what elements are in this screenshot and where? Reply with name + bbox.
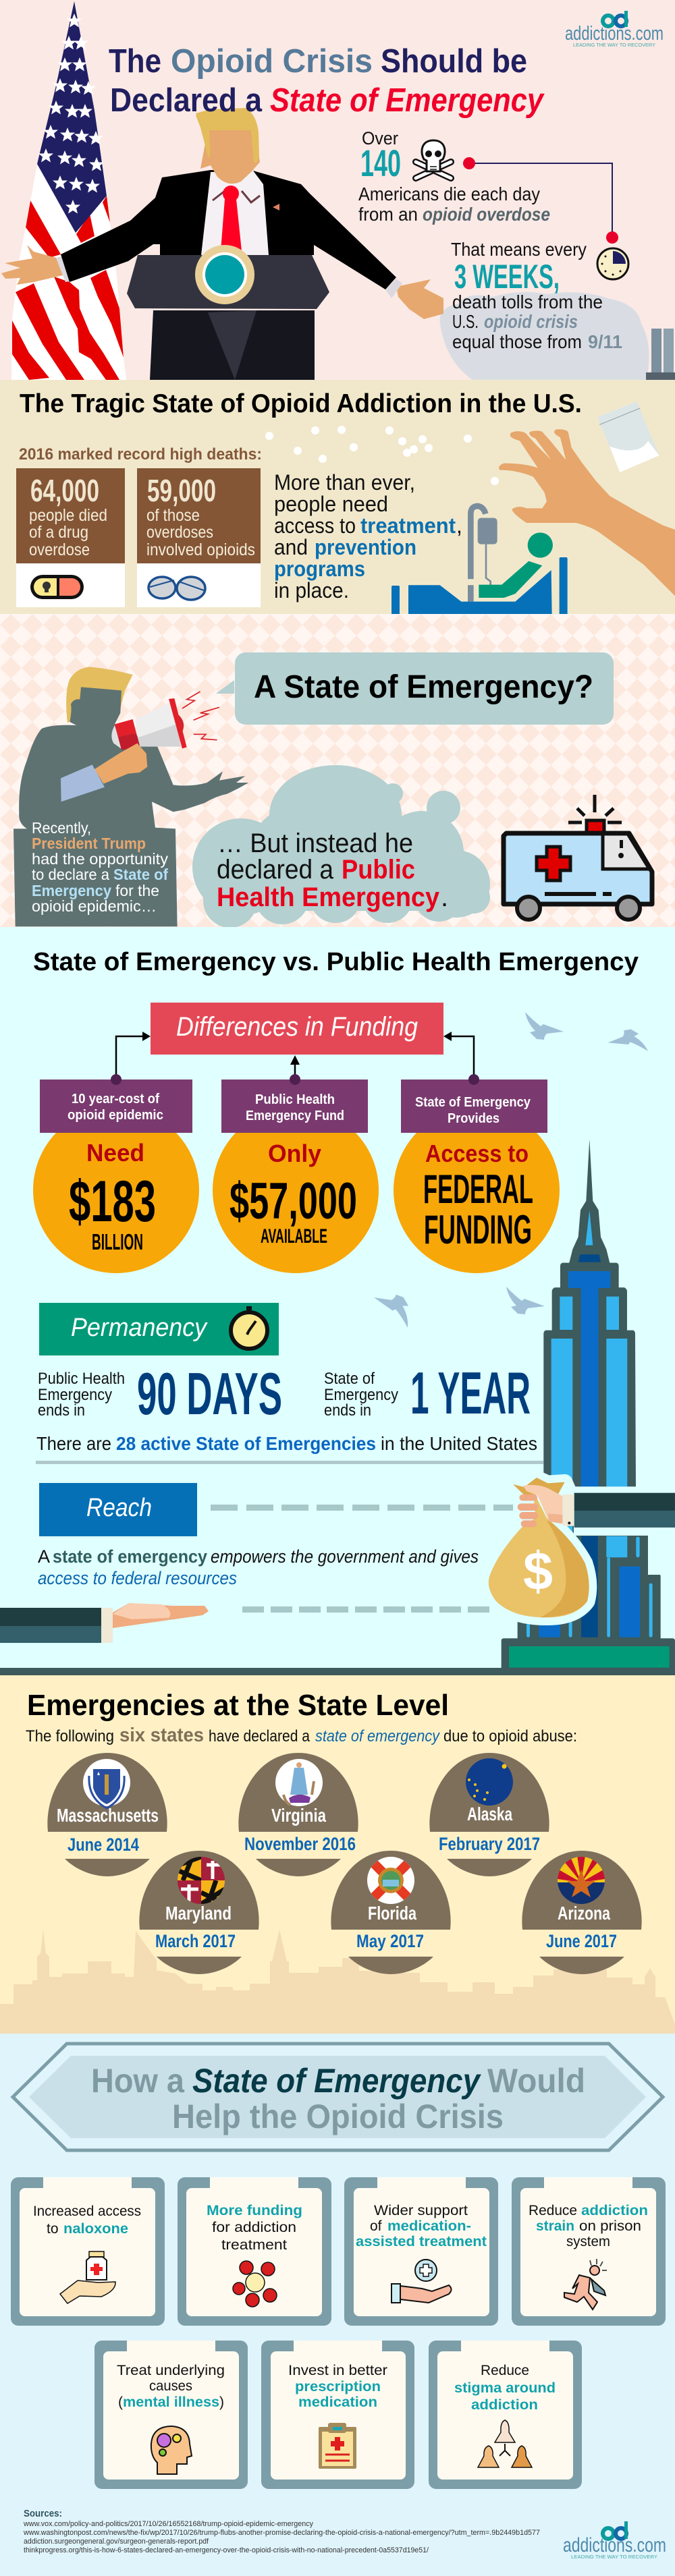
text: more than ever: programs (274, 557, 365, 581)
funding column: need: Need (86, 1139, 144, 1167)
thought cloud: Public (342, 855, 415, 885)
hexagon banner: State of Emergency (192, 2062, 481, 2100)
stat card: 59,000: of those (146, 506, 200, 525)
durations: 1 YEAR (410, 1360, 531, 1426)
text: reach description: access to federal resources (38, 1568, 237, 1588)
icon: skull and crossbones (416, 140, 451, 178)
arrows (116, 1032, 474, 1080)
funding column: access (394, 1074, 560, 1273)
card: more funding: treatment (221, 2237, 287, 2253)
text: more than ever: and (274, 535, 308, 559)
icon: dollar sign: $ (523, 1541, 553, 1601)
stat card: 59,000: overdoses (146, 523, 213, 542)
funding column: only: $57,000 (230, 1173, 357, 1230)
hexagon banner: Help the Opioid Crisis (172, 2098, 504, 2135)
card: medication-assisted treatment: of (370, 2218, 382, 2234)
card: prison system: addiction (581, 2203, 648, 2218)
text: recently president trump: had the opportunity (32, 850, 169, 868)
panel: emergencies at the state level (0, 1675, 675, 2034)
heading: State of Emergency vs. Public Health Emergency (33, 948, 639, 976)
hexagon banner: How a (91, 2062, 185, 2100)
callout: every 3 weeks: That means every (451, 239, 587, 260)
text: more than ever: More than ever, (274, 470, 415, 495)
hand reaching (499, 429, 675, 596)
card: prison system: strain (536, 2218, 574, 2234)
panel: how it would help (0, 2034, 675, 2576)
text: 28 active emergencies: There are (36, 1433, 111, 1454)
text: reach description: A (38, 1546, 50, 1567)
funding column: need: 10 year-cost of (72, 1092, 159, 1107)
icon: clock (597, 248, 628, 279)
card: stigma: addiction (471, 2397, 538, 2413)
durations: Emergency (324, 1386, 398, 1404)
stat card: 59,000: 59,000 (147, 473, 216, 508)
sources: addiction.surgeongeneral.gov/surgeon-generals-report.pdf (24, 2538, 209, 2546)
card: prescription medication (261, 2341, 414, 2489)
American flag (11, 1, 126, 380)
text: more than ever (274, 470, 462, 603)
callout: 140 deaths per day (358, 128, 550, 225)
stat card: 59,000: involved opioids (146, 540, 255, 559)
title: Declared a (110, 82, 263, 119)
funding column: access: Provides (448, 1111, 500, 1126)
text: recently president trump: Recently, (32, 819, 91, 837)
card: mental illness: causes (149, 2378, 192, 2394)
text: more than ever: , (456, 513, 462, 538)
title: State of Emergency (270, 82, 545, 119)
card: more funding: More funding (207, 2203, 302, 2218)
subtitle: have declared a (209, 1727, 310, 1745)
card: naloxone (11, 2177, 165, 2326)
icon: powder bag (597, 401, 659, 472)
card: medication-assisted treatment (344, 2177, 498, 2326)
funding column: need: opioid epidemic (68, 1108, 163, 1123)
card: mental illness: ( (118, 2395, 123, 2410)
thought cloud: … But instead he (217, 829, 413, 858)
callout: every 3 weeks (451, 239, 622, 352)
state: Virginia (238, 1753, 358, 1876)
subtitle: due to opioid abuse: (443, 1727, 577, 1745)
hand holding money bag (489, 1478, 675, 1617)
heading box: reach: Reach (86, 1494, 152, 1522)
funding column: only: Emergency Fund (246, 1109, 344, 1123)
state: Massachusetts (47, 1753, 167, 1876)
stat card: 64,000: overdose (29, 540, 90, 559)
funding column: only: AVAILABLE (261, 1225, 327, 1248)
icon: hospital bed and patient (392, 506, 568, 615)
funding column: need: $183 (69, 1169, 156, 1234)
callout: every 3 weeks: opioid crisis (484, 311, 578, 332)
funding column: need: BILLION (92, 1229, 143, 1254)
card: more funding: for addiction (212, 2220, 296, 2235)
callout: 140 deaths per day: Over (362, 128, 398, 148)
card: more funding (178, 2177, 331, 2326)
card: prescription medication: prescription (295, 2379, 381, 2395)
heading: Emergencies at the State Level (27, 1689, 449, 1722)
panel: state of emergency vs public health emergency (0, 927, 675, 1675)
dashes (211, 1505, 513, 1613)
card: stigma: Reduce (481, 2363, 529, 2378)
subtitle (26, 1725, 577, 1746)
heading box: differences in funding (151, 1003, 443, 1055)
card: naloxone: Increased access (33, 2204, 141, 2219)
panel: a state of emergency (0, 614, 675, 928)
state: Maryland: March 2017 (155, 1931, 236, 1951)
text: more than ever: prevention (315, 535, 416, 559)
thought cloud (192, 765, 490, 928)
durations: ends in (38, 1401, 85, 1420)
icon: ambulance (504, 795, 652, 920)
thought cloud: declared a (217, 855, 334, 885)
state: Alaska: February 2017 (439, 1834, 540, 1854)
text: recently president trump: opioid epidemic… (32, 897, 157, 915)
text: more than ever: people need (274, 492, 388, 516)
stat card: 64,000: of a drug (29, 523, 88, 542)
figure with megaphone (14, 667, 248, 926)
logo: addictions.com footer (563, 2521, 666, 2560)
hexagon banner (13, 2044, 663, 2150)
state: Arizona: June 2017 (546, 1931, 617, 1951)
panel: hero (0, 0, 675, 380)
title: Opioid Crisis (171, 43, 373, 80)
card: medication-assisted treatment: assisted treatment (356, 2234, 487, 2249)
text: reach description (38, 1546, 479, 1588)
state: Florida: May 2017 (356, 1931, 424, 1951)
state: Virginia: Virginia (271, 1805, 326, 1826)
text: 28 active emergencies: in the United States (381, 1433, 537, 1454)
funding column: access: Access to (425, 1140, 529, 1167)
card: stigma (429, 2341, 582, 2489)
text: 2016 record deaths: 2016 marked record high deaths: (19, 445, 262, 464)
text: recently president trump: President Trump (32, 835, 146, 852)
heading box: permanency (39, 1303, 279, 1355)
thought cloud: . (441, 883, 448, 912)
card: mental illness (94, 2341, 248, 2489)
text: recently president trump: Emergency (32, 882, 111, 899)
logo: addictions.com: LEADING THE WAY TO RECOVERY (573, 43, 655, 48)
text: more than ever: treatment (360, 513, 456, 538)
logo: addictions.com footer: LEADING THE WAY TO RECOVERY (571, 2554, 657, 2560)
text: reach description: empowers the government and gives (211, 1546, 479, 1567)
callout: every 3 weeks: 9/11 (588, 331, 622, 352)
text: more than ever: access to (274, 513, 356, 538)
text: 28 active emergencies (36, 1433, 537, 1454)
connector line (463, 157, 618, 244)
card: naloxone: naloxone (63, 2221, 128, 2237)
president figure at podium (1, 108, 443, 380)
state: Arizona (522, 1851, 642, 1974)
state: Florida (331, 1851, 451, 1974)
durations: 90 DAYS (137, 1360, 282, 1427)
text: 28 active emergencies: 28 active State of Emergencies (116, 1433, 376, 1454)
heading box: permanency: Permanency (71, 1314, 208, 1342)
state: Arizona: Arizona (558, 1903, 610, 1924)
state: Alaska: Alaska (467, 1803, 512, 1824)
funding column: only: Only (268, 1140, 321, 1167)
card: prescription medication: medication (298, 2395, 377, 2410)
icon: twin towers (646, 329, 675, 380)
durations: ends in (324, 1401, 371, 1420)
tower (543, 1139, 636, 1536)
callout: every 3 weeks: equal those from (452, 331, 582, 352)
funding column: need (33, 1074, 199, 1273)
state: Maryland: Maryland (165, 1903, 232, 1924)
tower base (502, 1536, 675, 1670)
subtitle: state of emergency (315, 1727, 441, 1745)
card: prison system: on prison (579, 2218, 641, 2234)
text: recently president trump: for the (115, 882, 159, 899)
funding column: only (213, 1074, 379, 1273)
card: prison system (512, 2177, 666, 2326)
durations: State of (324, 1370, 375, 1388)
card: stigma: stigma around (454, 2380, 556, 2396)
state: Alaska (429, 1753, 549, 1876)
card: prison system: system (566, 2234, 610, 2249)
stat card: 59,000 (137, 468, 261, 607)
hexagon banner: Would (487, 2062, 585, 2100)
callout: 140 deaths per day: from an (358, 204, 418, 225)
text: recently president trump: State of (113, 866, 168, 883)
state: Massachusetts: Massachusetts (57, 1805, 159, 1826)
falling pills (265, 426, 499, 485)
sources: thinkprogress.org/this-is-how-6-states-declared-an-emergency-over-the-opioid-crisis-with-no-national-precedent-0a5537d19e51/ (24, 2546, 429, 2554)
card: prison system: Reduce (529, 2203, 577, 2218)
smoke cloud (440, 292, 649, 380)
heading: The Tragic State of Opioid Addiction in the U.S. (20, 389, 582, 418)
state: Maryland (139, 1851, 259, 1974)
state: Virginia: November 2016 (244, 1834, 356, 1854)
text: more than ever: in place. (274, 578, 349, 603)
callout: every 3 weeks: death tolls from the (452, 291, 603, 312)
sources: www.washingtonpost.com/news/the-fix/wp/2017/10/26/trump-flubs-another-promise-declaring-the-opioid-crisis-a-national-emergency/?utm_term=.9b2449b1d577 (23, 2529, 540, 2537)
ground bar (0, 1668, 675, 1675)
card: naloxone: to (47, 2221, 59, 2237)
birds (369, 1012, 648, 1328)
sources: Sources: (24, 2508, 62, 2519)
skyline (0, 1930, 675, 2034)
title: Should be (381, 43, 527, 80)
panel: tragic state of addiction (0, 380, 675, 615)
card: mental illness: ) (219, 2395, 224, 2410)
card: medication-assisted treatment: medication- (387, 2218, 471, 2234)
title: The (109, 43, 161, 80)
state: Florida: Florida (368, 1903, 416, 1924)
text: recently president trump: to declare a (32, 866, 109, 883)
title (109, 43, 545, 119)
callout: 140 deaths per day: 140 (360, 142, 401, 184)
speech bubble (216, 652, 614, 725)
funding column: access: State of Emergency (415, 1095, 531, 1110)
callout: 140 deaths per day: Americans die each day (358, 184, 540, 204)
callout: 140 deaths per day: opioid overdose (423, 204, 550, 225)
durations: Public Health (38, 1370, 125, 1388)
callout: every 3 weeks: 3 WEEKS, (454, 258, 560, 296)
text: recently president trump (32, 819, 169, 915)
sources (23, 2508, 540, 2554)
funding column: only: Public Health (255, 1092, 335, 1107)
thought cloud: Health Emergency (217, 883, 440, 912)
heading box: reach (39, 1483, 197, 1536)
logo: addictions.com (565, 11, 664, 48)
receiving hand (0, 1603, 209, 1643)
funding column: access: FUNDING (424, 1207, 532, 1252)
card: medication-assisted treatment: Wider support (374, 2203, 468, 2218)
state: Massachusetts: June 2014 (68, 1835, 139, 1855)
heading box: differences in funding: Differences in Funding (176, 1012, 418, 1042)
funding column: access: FEDERAL (423, 1167, 533, 1212)
subtitle: six states (119, 1725, 204, 1746)
text: reach description: state of emergency (53, 1546, 207, 1567)
card: mental illness: Treat underlying (117, 2363, 225, 2378)
stat card: 64,000 (16, 468, 125, 607)
stat card: 64,000: people died (29, 506, 107, 525)
card: prescription medication: Invest in better (288, 2363, 387, 2378)
callout: every 3 weeks: U.S. (452, 311, 479, 332)
sources: www.vox.com/policy-and-politics/2017/10/26/16552168/trump-opioid-epidemic-emergency (23, 2520, 313, 2528)
durations (38, 1360, 531, 1427)
subtitle: The following (26, 1727, 114, 1745)
durations: Emergency (38, 1386, 112, 1404)
stat card: 64,000: 64,000 (30, 473, 99, 508)
card: mental illness: mental illness (123, 2395, 219, 2410)
speech bubble: A State of Emergency? (254, 669, 593, 705)
